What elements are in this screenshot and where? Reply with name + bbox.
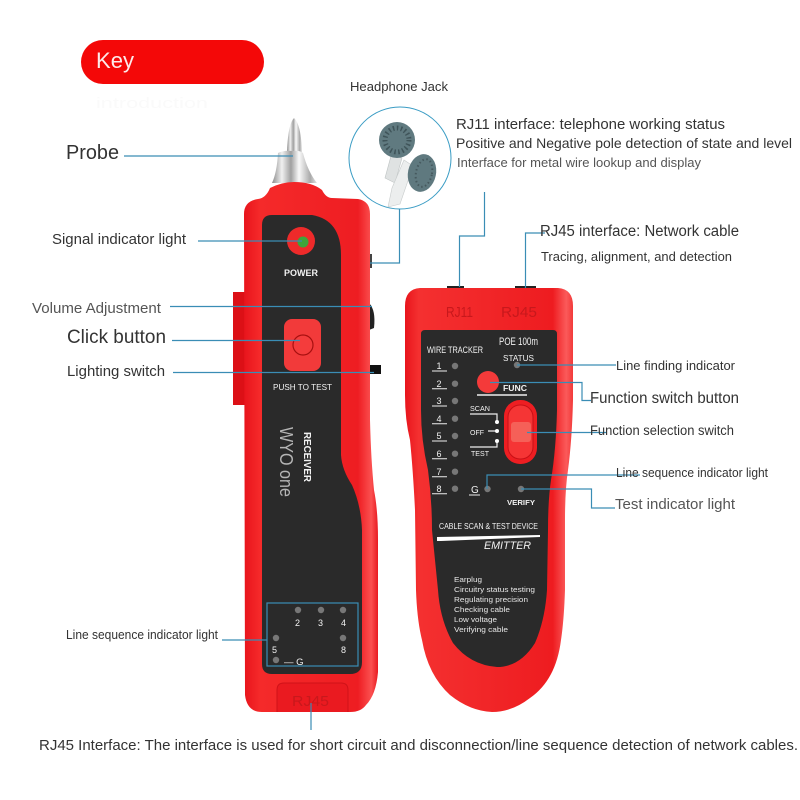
function list: Earplug [454, 575, 482, 584]
power label: POWER [284, 268, 318, 278]
label: click button: Click button [67, 327, 166, 348]
test button [284, 319, 321, 371]
label: probe: Probe [66, 142, 119, 164]
key badge: Key [96, 48, 134, 73]
label: rj11 line 3: Interface for metal wire lookup and display [457, 155, 702, 170]
emitter body [405, 288, 573, 712]
numbered leds: 1 [436, 361, 442, 371]
numbered leds: 5 [436, 431, 442, 441]
func button [477, 371, 499, 393]
receiver leds: 5 [272, 645, 277, 655]
switch markings: SCAN [470, 404, 490, 413]
probe needle [287, 118, 302, 152]
brand text: WYO one [276, 427, 296, 497]
label: test indicator: Test indicator light [615, 496, 736, 513]
receiver leds: 4 [341, 618, 346, 628]
switch markings: TEST [471, 449, 489, 458]
label: line finding: Line finding indicator [616, 358, 736, 373]
switch markings: OFF [470, 428, 484, 437]
rj labels: RJ11 [446, 304, 473, 321]
label: signal indicator: Signal indicator light [52, 232, 186, 248]
status label: STATUS [503, 354, 534, 363]
numbered leds: 8 [436, 484, 442, 494]
device title: CABLE SCAN & TEST DEVICE [439, 522, 538, 531]
rj labels [446, 304, 537, 321]
probe cone [272, 151, 317, 183]
volume wheel [369, 303, 374, 330]
status led [514, 362, 520, 368]
numbered leds: 6 [436, 449, 442, 459]
receiver leds: 2 [295, 618, 300, 628]
side clip [233, 292, 245, 405]
label: function switch button: Function switch button [590, 390, 739, 407]
faint subtitle: introduction [96, 95, 208, 112]
black panel [262, 215, 362, 674]
rj45 tab [277, 683, 348, 712]
numbered leds [432, 361, 458, 494]
label: rj45 bottom note: RJ45 Interface: The interface is used for short circuit and disconnection/line sequence detection of network cables. [39, 737, 798, 754]
headphone jack port [369, 254, 372, 268]
label: function selection: Function selection switch [590, 423, 734, 438]
top ports [447, 286, 536, 289]
func label: FUNC [503, 384, 527, 393]
numbered leds: 7 [436, 467, 442, 477]
g and verify leds: G [471, 485, 479, 496]
label: volume: Volume Adjustment [32, 300, 162, 317]
func label [477, 384, 527, 395]
function list: Regulating precision [454, 595, 528, 604]
push to test label: PUSH TO TEST [273, 382, 332, 392]
numbered leds: 2 [436, 379, 442, 389]
receiver device [233, 118, 381, 712]
function list: Verifying cable [454, 625, 508, 634]
receiver leds: — G [284, 657, 304, 668]
poe label: POE 100m [499, 336, 538, 348]
numbered leds: 3 [436, 396, 442, 406]
function list: Low voltage [454, 615, 497, 624]
label: rj11 line 2: Positive and Negative pole detection of state and level [456, 135, 792, 151]
earphone callout [349, 107, 451, 209]
function list [454, 575, 535, 634]
device title [437, 522, 540, 552]
g and verify leds [469, 485, 535, 507]
label: headphone jack: Headphone Jack [350, 79, 448, 94]
label: rj45 heading: RJ45 interface: Network cable [540, 223, 739, 240]
selection switch [504, 400, 537, 464]
power led [287, 227, 315, 255]
receiver body [244, 182, 378, 712]
numbered leds: 4 [436, 414, 442, 424]
receiver leds: 3 [318, 618, 323, 628]
wire tracker label: WIRE TRACKER [427, 345, 483, 356]
g and verify leds: VERIFY [507, 500, 535, 507]
label: rj45 detail: Tracing, alignment, and detection [541, 249, 732, 264]
emitter panel [421, 330, 557, 667]
earphone cables [385, 156, 413, 207]
switch markings [470, 404, 499, 458]
label: line sequence left: Line sequence indicator light [66, 628, 218, 642]
receiver text: RECEIVER [301, 432, 313, 482]
label: line sequence right: Line sequence indicator light [616, 466, 768, 480]
label: rj11 heading: RJ11 interface: telephone working status [456, 116, 725, 133]
label: lighting switch: Lighting switch [67, 364, 165, 380]
receiver leds [272, 607, 346, 668]
device title: EMITTER [484, 540, 531, 552]
leader lines [124, 156, 640, 730]
rj45 tab: RJ45 [292, 694, 329, 710]
emitter device [405, 286, 573, 712]
lighting switch [369, 365, 381, 374]
function list: Checking cable [454, 605, 510, 614]
rj labels: RJ45 [501, 304, 537, 321]
key badge [81, 40, 264, 84]
earphone right [404, 152, 440, 194]
function list: Circuitry status testing [454, 585, 535, 594]
earphone left [379, 122, 415, 158]
receiver leds: 8 [341, 645, 346, 655]
